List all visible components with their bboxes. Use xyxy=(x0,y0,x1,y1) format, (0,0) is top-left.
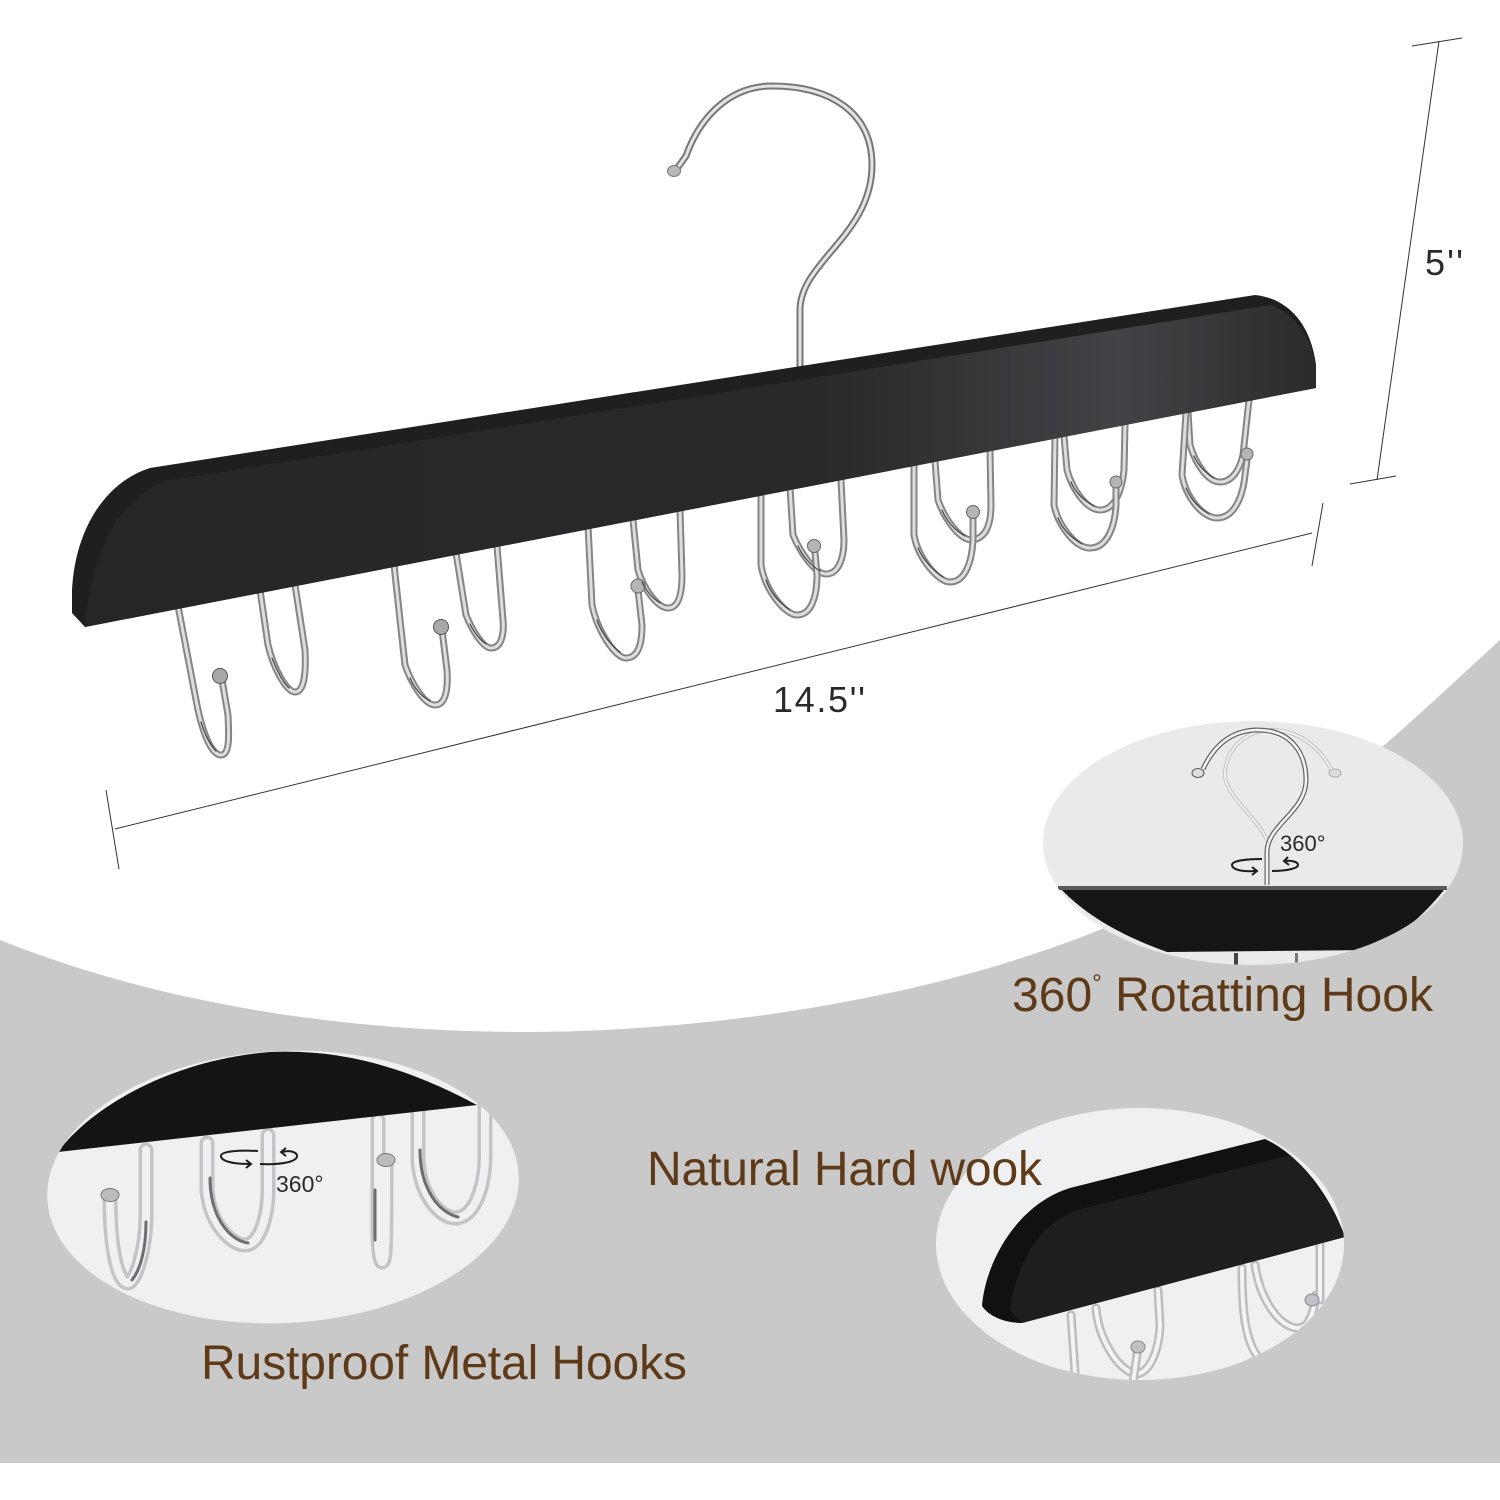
label: metal hooks: Rustproof Metal Hooks xyxy=(201,1337,687,1390)
dimension: width line xyxy=(106,503,1323,869)
hook close-ups xyxy=(1071,1245,1320,1382)
bar segment xyxy=(1058,886,1447,965)
label: rotating hook: 360 xyxy=(1012,969,1092,1022)
width label: 14.5'' xyxy=(773,679,865,720)
360 label: 360° xyxy=(1280,831,1326,856)
bar segment xyxy=(982,1139,1345,1323)
rotation arrow xyxy=(1232,857,1298,875)
product: hanger xyxy=(72,86,1316,755)
ghost hook position xyxy=(1225,730,1341,840)
rotation arrow xyxy=(221,1148,297,1168)
front hooks with ball tips xyxy=(178,413,1253,755)
label: rotating hook: ° xyxy=(1092,970,1102,997)
swivel hook wire xyxy=(668,86,872,368)
hook close-ups xyxy=(101,1105,485,1283)
panel: hardwood detail xyxy=(936,1108,1345,1382)
height label: 5'' xyxy=(1425,242,1463,283)
wooden bar xyxy=(72,295,1316,627)
360 label: 360° xyxy=(276,1171,324,1197)
panel: rotating hook detail xyxy=(1043,721,1463,965)
chrome glints on hooks xyxy=(201,456,1214,751)
bar segment xyxy=(58,1052,477,1152)
label: rotating hook: Rotatting Hook xyxy=(1102,969,1434,1022)
panel: metal hooks detail xyxy=(47,1050,519,1324)
main hook position xyxy=(1192,730,1306,885)
rear hooks xyxy=(260,400,1249,692)
dimension: height line xyxy=(1350,38,1462,484)
label: natural hardwood: Natural Hard wook xyxy=(647,1143,1043,1196)
